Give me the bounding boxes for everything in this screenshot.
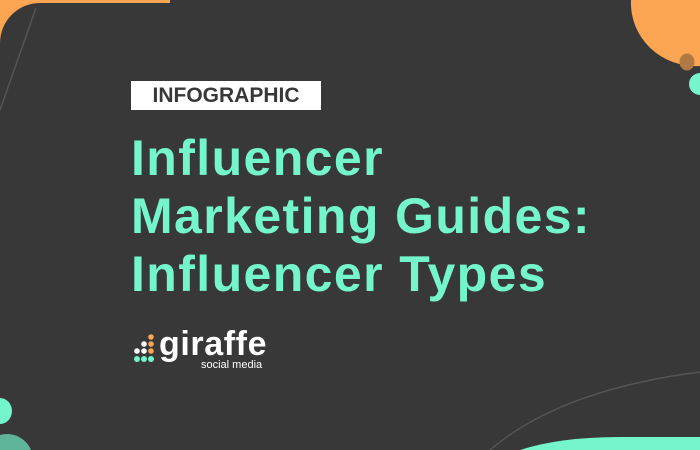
title: Marketing Guides:: [131, 188, 591, 244]
title: Influencer Types: [131, 246, 547, 302]
label: INFOGRAPHIC: INFOGRAPHIC: [152, 84, 300, 107]
icon: dots: [134, 334, 154, 362]
logo: giraffe social media: giraffe: [159, 325, 267, 363]
orange top band: [170, 0, 700, 3]
title: [131, 130, 591, 302]
logo: giraffe social media: social media: [201, 359, 262, 371]
title: Influencer: [131, 130, 384, 186]
label: INFOGRAPHIC: [131, 81, 321, 110]
logo: giraffe social media: [134, 325, 267, 371]
